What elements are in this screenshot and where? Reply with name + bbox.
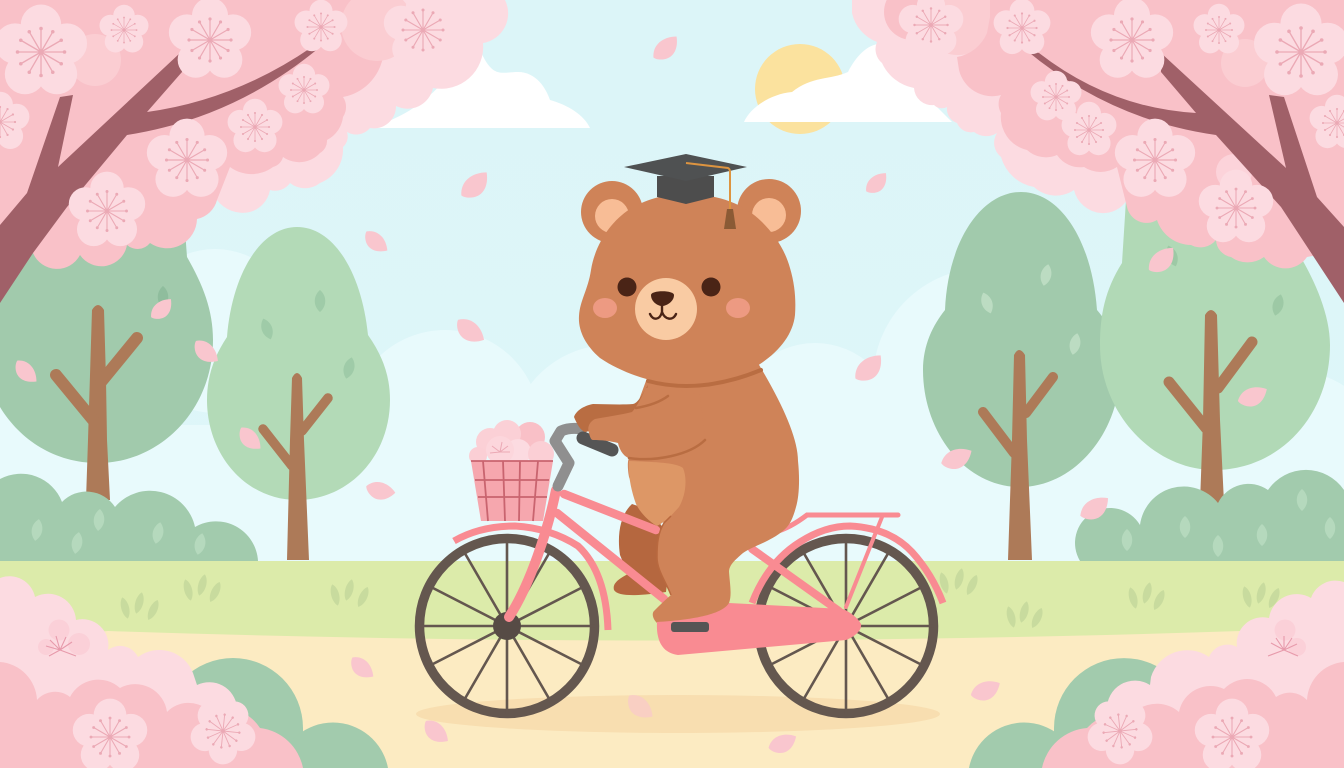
eyes bbox=[618, 278, 720, 296]
blossoms top right bbox=[899, 0, 1344, 242]
bear body bbox=[628, 350, 799, 624]
tassel bbox=[724, 209, 736, 229]
basket with blossoms bbox=[469, 420, 554, 521]
bicycle rear wheel bbox=[758, 538, 934, 714]
bear ears bbox=[581, 179, 801, 243]
faint blossom bbox=[38, 620, 90, 656]
nose and mouth bbox=[650, 291, 676, 319]
bottom right foliage bbox=[969, 581, 1344, 768]
bicycle front wheel bbox=[419, 538, 595, 714]
sun bbox=[755, 44, 845, 134]
belly bbox=[629, 461, 686, 526]
grass tufts bbox=[119, 567, 1282, 630]
bottom left foliage bbox=[0, 576, 388, 768]
tree: far left bbox=[0, 230, 213, 500]
tree: right centre bbox=[923, 192, 1120, 560]
tree: left centre bbox=[207, 227, 390, 560]
bear arm bbox=[574, 385, 705, 459]
cloud left bbox=[372, 45, 590, 128]
tree: far right bbox=[1100, 200, 1330, 503]
background hills bbox=[0, 249, 1344, 570]
bike ground shadow bbox=[416, 695, 940, 733]
graduation cap bbox=[624, 154, 747, 229]
blossoms top left bbox=[0, 0, 462, 246]
muzzle bbox=[635, 278, 697, 340]
sky background bbox=[0, 0, 1344, 600]
path bbox=[0, 631, 1344, 768]
cheeks bbox=[593, 298, 750, 318]
handlebar bbox=[555, 428, 612, 486]
grass band bbox=[0, 561, 1344, 656]
cherry tree canopy top left bbox=[0, 0, 508, 303]
bear head bbox=[579, 194, 795, 386]
faint blossom bbox=[1268, 620, 1306, 656]
bicycle chain guard bbox=[657, 603, 861, 655]
bicycle frame bbox=[454, 490, 943, 630]
cherry tree canopy top right bbox=[852, 0, 1344, 303]
bushes right bbox=[1075, 470, 1344, 561]
cloud right bbox=[744, 44, 952, 122]
bear back leg bbox=[614, 504, 672, 595]
bushes left bbox=[0, 474, 258, 561]
